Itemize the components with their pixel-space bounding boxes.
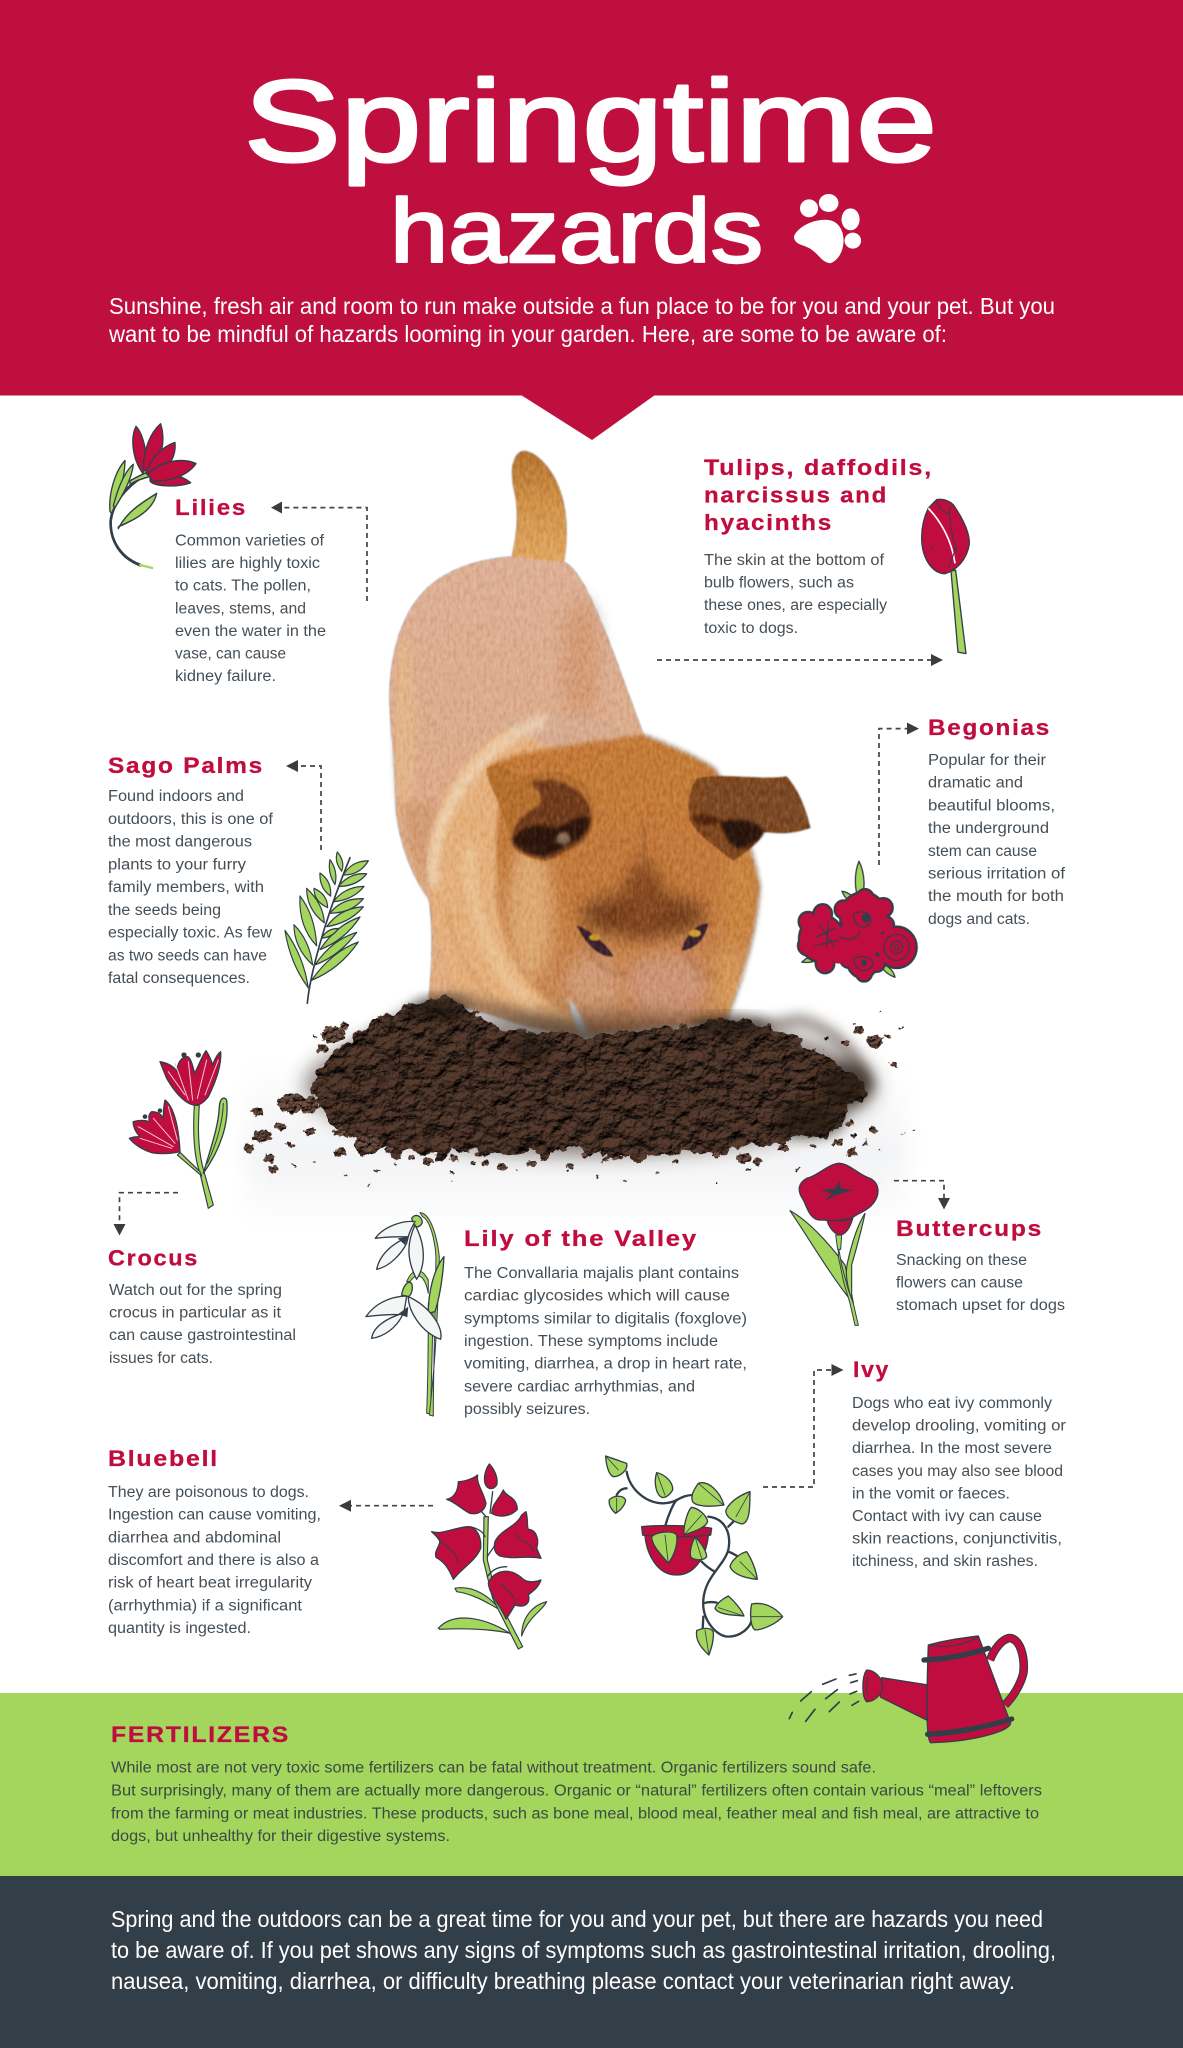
body text [704,552,887,637]
body text: lilies are highly toxic [175,555,320,572]
icon: bluebell flower [432,1464,547,1649]
header pointer [521,395,655,440]
body text: The Convallaria majalis plant contains [464,1265,739,1282]
arrow [339,1500,433,1512]
body text: kidney failure. [175,668,276,685]
panel: tulips, daffodils, narcissus and hyacinths [657,455,969,666]
body text: symptoms similar to digitalis (foxglove) [464,1310,747,1327]
body text: cases you may also see blood [852,1463,1063,1480]
heading: Sago Palms [108,753,264,778]
title: Springtime [244,56,937,186]
body text [111,1760,1042,1845]
title [244,56,937,282]
body text [896,1252,1065,1314]
body text: serious irritation of [928,866,1066,882]
neck ruff [430,729,583,1031]
body text [175,532,326,685]
body text: itchiness, and skin rashes. [852,1553,1038,1570]
heading: Begonias [928,715,1051,740]
icon: buttercup [790,1163,878,1325]
body text: plants to your furry [108,856,246,873]
body text [928,752,1066,928]
body text: leaves, stems, and [175,600,306,617]
dog right ear [689,776,811,861]
body text: flowers can cause [896,1274,1023,1292]
body text [108,788,274,987]
arrow [657,654,943,666]
intro text [108,293,1055,347]
body text: can cause gastrointestinal [109,1327,296,1344]
dog tail [510,451,567,567]
icon: hanging ivy pot [606,1456,783,1655]
icon: paw print [794,194,861,263]
title: hazards [390,182,763,282]
icon: crocus flowers [129,1051,227,1208]
closing text: nausea, vomiting, diarrhea, or difficulty breathing please contact your veterinarian right away. [111,1968,1015,1994]
body text: develop drooling, vomiting or [852,1418,1066,1435]
arrow [271,502,367,601]
body text: beautiful blooms, [928,797,1055,814]
body text: Common varieties of [175,532,325,550]
soil dark patches [410,998,871,1138]
body text: in the vomit or faeces. [852,1485,1010,1502]
body text: outdoors, this is one of [108,811,274,828]
body text: Found indoors and [108,788,244,805]
body text: to cats. The pollen, [175,578,311,595]
body text: diarrhea. In the most severe [852,1440,1052,1457]
body text: from the farming or meat industries. These products, such as bone meal, blood meal, feather meal and fish meal, are attractive to [111,1805,1039,1822]
water drops [789,1674,859,1721]
body text: stomach upset for dogs [896,1297,1065,1314]
dog head [483,733,767,1044]
panel: sago palms [108,753,368,1003]
heading: Crocus [108,1246,199,1270]
body text: Watch out for the spring [109,1282,282,1299]
arrow [763,1364,844,1487]
header panel [0,0,1183,440]
body text: the seeds being [108,902,221,919]
soil crumbs [244,1011,915,1186]
heading: narcissus and [704,482,888,508]
dog body [389,556,645,1039]
dog photo illustration [389,451,811,1044]
body text: quantity is ingested. [108,1620,251,1637]
heading: Lilies [175,495,247,520]
body text: these ones, are especially [704,597,887,614]
icon: lily of the valley [366,1213,444,1416]
body text: diarrhea and abdominal [108,1529,281,1546]
body text: risk of heart beat irregularity [108,1575,312,1592]
icon: sago palm frond [285,852,368,1003]
body text: severe cardiac arrhythmias, and [464,1378,695,1395]
body text: dramatic and [928,775,1023,792]
arrow [894,1181,950,1210]
panel: begonias [798,715,1066,981]
body text: dogs and cats. [928,911,1030,928]
icon: tulip [922,499,969,654]
dog muzzle streak [568,998,588,1037]
heading: hyacinths [704,510,833,535]
body text: Contact with ivy can cause [852,1508,1042,1525]
heading: FERTILIZERS [111,1722,290,1747]
panel: fertilizers [0,1636,1183,1876]
body text: especially toxic. As few [108,924,273,942]
intro text: Sunshine, fresh air and room to run make outside a fun place to be for you and your pet. But you [109,293,1055,319]
panel: bluebell [108,1446,547,1649]
heading: Lily of the Valley [464,1226,698,1251]
heading: Bluebell [108,1446,219,1471]
closing text [111,1906,1056,1994]
body text: discomfort and there is also a [108,1552,319,1569]
panel: lily of the valley [366,1213,747,1418]
body text: Popular for their [928,752,1046,769]
panel: buttercups [790,1163,1065,1325]
body text [109,1282,296,1367]
icon: begonia bouquet [798,861,917,981]
panel: closing message [0,1876,1183,2048]
panel: ivy [606,1357,1066,1655]
intro text: want to be mindful of hazards looming in your garden. Here, are some to be aware of: [108,321,947,347]
body text: The skin at the bottom of [704,552,885,569]
body text: crocus in particular as it [109,1305,282,1322]
heading: Tulips, daffodils, [704,455,933,480]
closing text: Spring and the outdoors can be a great time for you and your pet, but there are hazards you need [111,1906,1043,1932]
body text: even the water in the [175,623,326,640]
ground shadow behind soil [246,1060,906,1230]
arrow [879,722,919,865]
body text: While most are not very toxic some fertilizers can be fatal without treatment. Organic fertilizers sound safe. [111,1760,876,1777]
panel: lilies [110,424,367,685]
body text: the most dangerous [108,834,252,850]
heading [704,455,933,535]
body text: Dogs who eat ivy commonly [852,1395,1052,1412]
dog left ear [487,765,594,861]
body text: But surprisingly, many of them are actually more dangerous. Organic or “natural” fertilizers often contain various “meal” leftovers [111,1782,1042,1800]
arrow [286,760,321,850]
body text: skin reactions, conjunctivitis, [852,1531,1062,1548]
body text: the mouth for both [928,888,1064,905]
body text: as two seeds can have [108,947,267,964]
body text: family members, with [108,879,264,896]
body text: possibly seizures. [464,1401,590,1418]
icon: lily flower [110,424,196,568]
body text: Snacking on these [896,1252,1027,1269]
body text: the underground [928,820,1049,837]
icon: watering can [789,1636,1024,1743]
body text: issues for cats. [109,1350,213,1367]
heading: Ivy [853,1357,890,1382]
body text [108,1484,321,1637]
body text: vase, can cause [175,646,286,662]
arrow [114,1193,178,1236]
body text: bulb flowers, such as [704,575,854,592]
heading: Buttercups [896,1216,1043,1241]
soil mound [244,997,915,1186]
body text: (arrhythmia) if a significant [108,1597,303,1614]
body text: toxic to dogs. [704,620,798,637]
body text: They are poisonous to dogs. [108,1484,309,1501]
body text [852,1395,1066,1570]
body text: fatal consequences. [108,970,250,987]
body text: stem can cause [928,843,1037,860]
body text [464,1265,747,1418]
closing text: to be aware of. If you pet shows any signs of symptoms such as gastrointestinal irritation, drooling, [111,1937,1056,1963]
body text: cardiac glycosides which will cause [464,1288,730,1305]
panel: crocus [108,1051,296,1367]
body text: dogs, but unhealthy for their digestive systems. [111,1828,450,1845]
body text: Ingestion can cause vomiting, [108,1507,321,1524]
body text: ingestion. These symptoms include [464,1333,718,1350]
body text: vomiting, diarrhea, a drop in heart rate, [464,1356,747,1373]
dog eyes [577,923,708,957]
